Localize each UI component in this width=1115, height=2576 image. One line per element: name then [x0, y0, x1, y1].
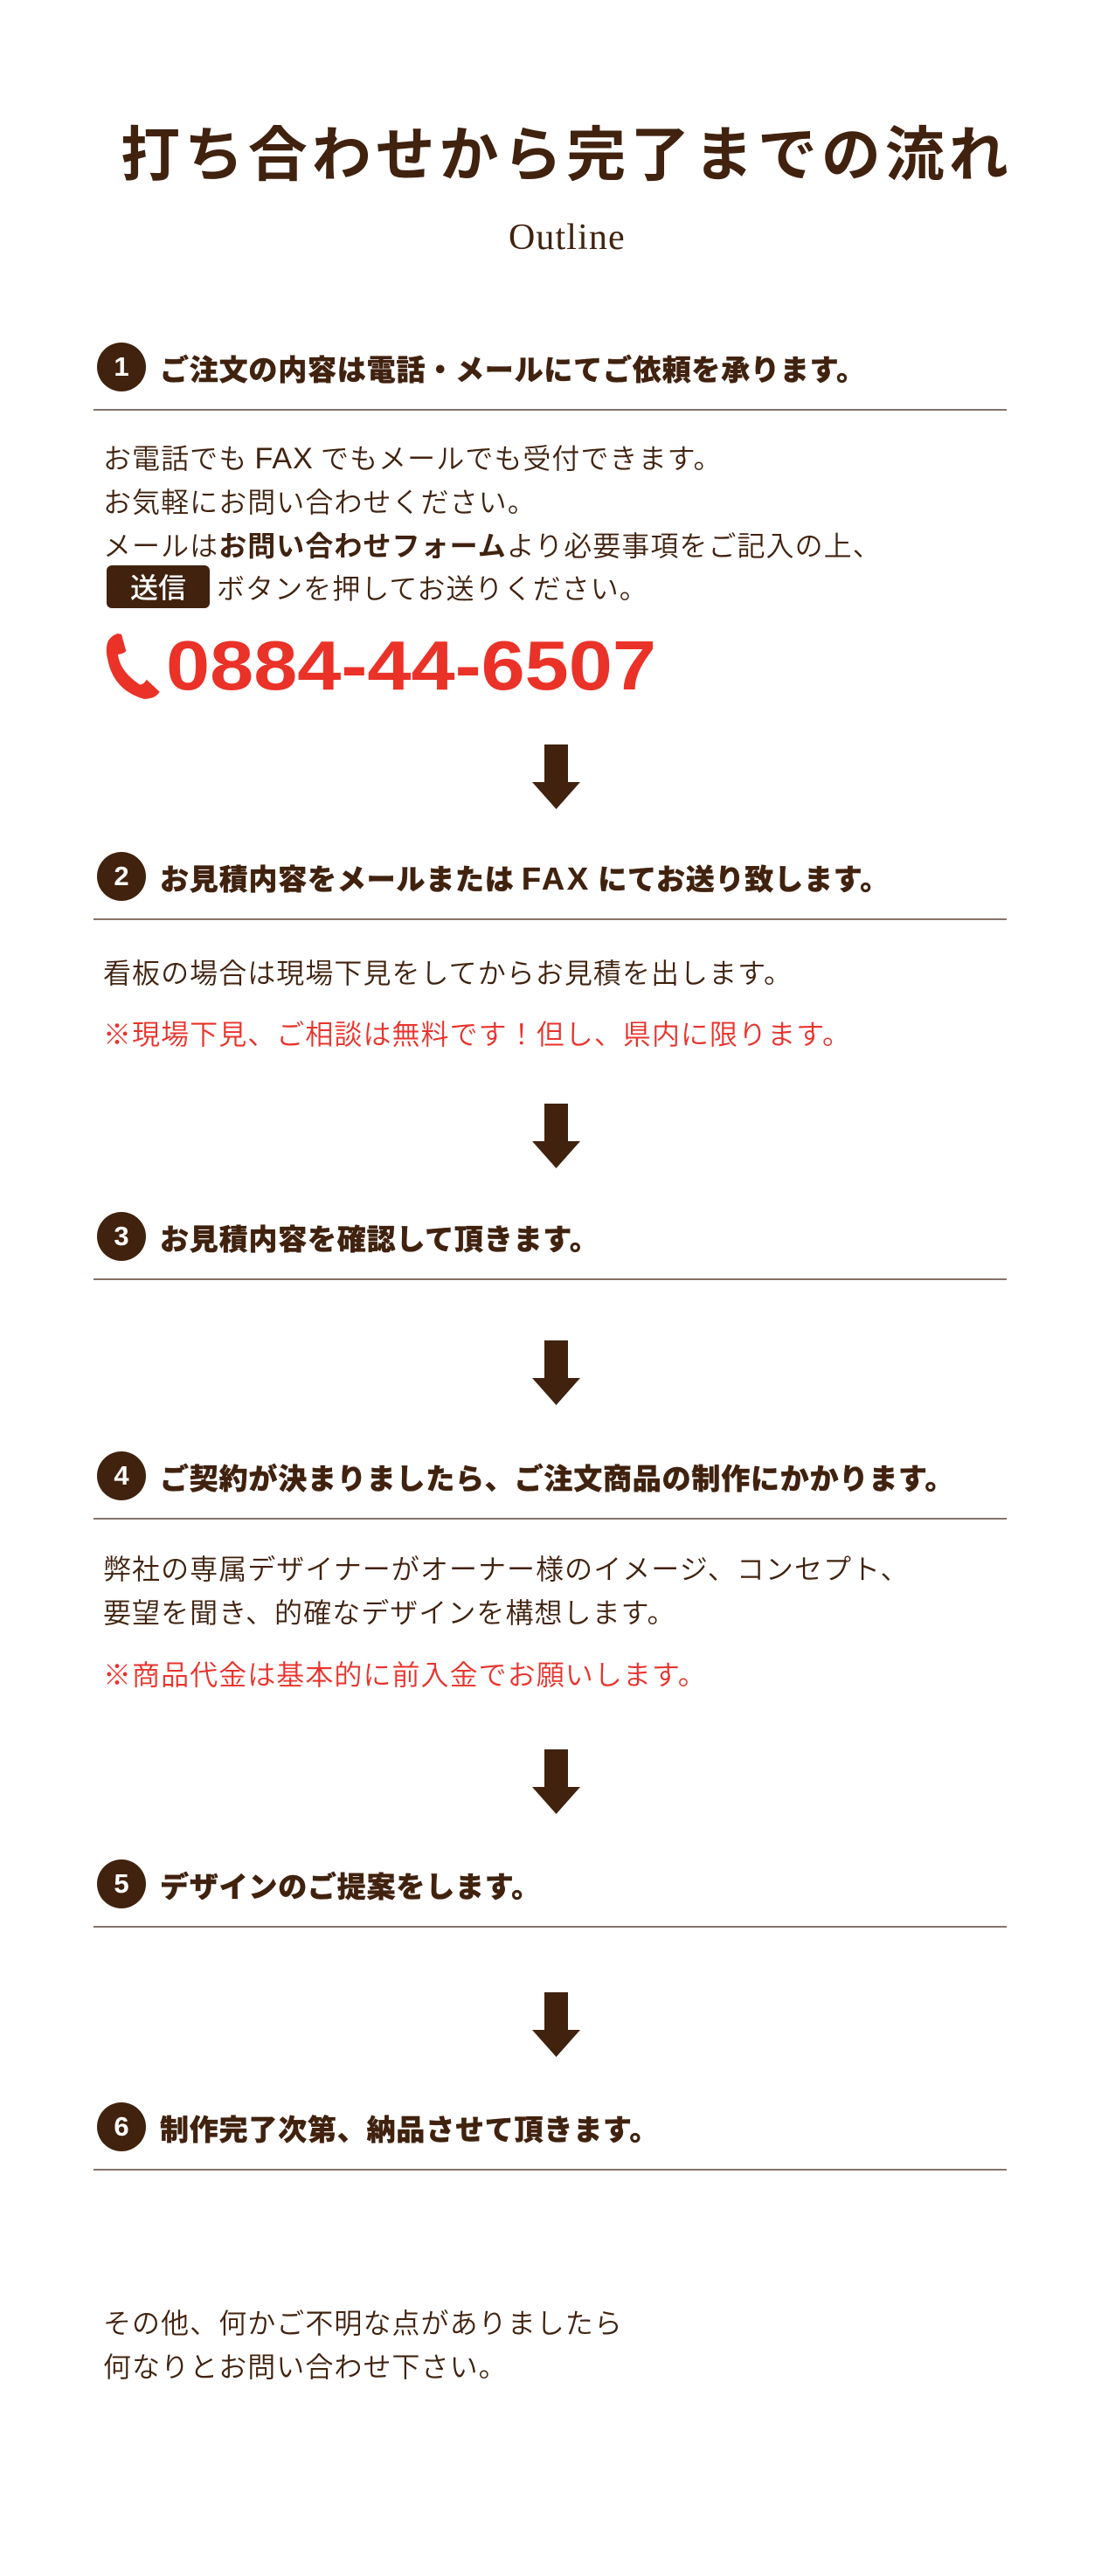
step 2 title: お見積内容をメールまたは FAX にてお送り致します。: [160, 856, 890, 898]
closing text: 何なりとお問い合わせ下さい。: [103, 2345, 508, 2386]
step 6 title: 制作完了次第、納品させて頂きます。: [160, 2107, 659, 2149]
arrow 5: [532, 1992, 580, 2057]
text line: お気軽にお問い合わせください。: [103, 481, 537, 521]
send button: 送信: [130, 566, 186, 606]
step 5 heading: [93, 1859, 1007, 1928]
arrow 4: [532, 1749, 580, 1814]
step 1 title: ご注文の内容は電話・メールにてご依頼を承ります。: [160, 347, 866, 389]
step 2 heading: [93, 852, 1007, 920]
number badge 4: [97, 1451, 146, 1500]
number badge 5: [97, 1859, 146, 1908]
number badge 2: [97, 852, 146, 901]
number badge 6: [97, 2102, 146, 2151]
number badge 4: 4: [114, 1460, 129, 1491]
step 4 body text: 要望を聞き、的確なデザインを構想します。: [103, 1591, 676, 1631]
step 4 red note: ※商品代金は基本的に前入金でお願いします。: [103, 1653, 707, 1693]
step 4 heading: [93, 1451, 1007, 1520]
step 4 title: ご契約が決まりましたら、ご注文商品の制作にかかります。: [160, 1456, 954, 1498]
subtitle: Outline: Outline: [509, 218, 626, 258]
number badge 2: 2: [114, 861, 129, 891]
title: 打ち合わせから完了までの流れ: [121, 107, 1013, 193]
closing text: [103, 2302, 623, 2386]
text line with bold link: メールはお問い合わせフォームより必要事項をご記入の上、: [103, 524, 882, 564]
send button: [107, 565, 210, 608]
icon: telephone: [107, 634, 160, 699]
text line: お電話でも FAX でもメールでも受付できます。: [103, 437, 723, 477]
step 2 body text: 看板の場合は現場下見をしてからお見積を出します。: [103, 952, 793, 992]
number badge 1: [97, 343, 146, 391]
text line after button: ボタンを押してお送りください。: [217, 567, 648, 607]
number badge 3: [97, 1212, 146, 1261]
step 1 heading: [93, 343, 1007, 411]
arrow 2: [532, 1104, 580, 1168]
step 3 title: お見積内容を確認して頂きます。: [160, 1216, 599, 1258]
step 4 body text: [103, 1548, 910, 1631]
step 5 title: デザインのご提案をします。: [160, 1864, 541, 1906]
number badge 3: 3: [114, 1221, 129, 1251]
closing text: その他、何かご不明な点がありましたら: [103, 2302, 623, 2342]
step 2 red note: ※現場下見、ご相談は無料です！但し、県内に限ります。: [103, 1013, 851, 1053]
number badge 6: 6: [114, 2111, 129, 2142]
step 3 heading: [93, 1212, 1007, 1280]
arrow 3: [532, 1340, 580, 1405]
step 1 body text: [103, 437, 882, 608]
arrow 1: [532, 744, 580, 809]
step 4 body text: 弊社の専属デザイナーがオーナー様のイメージ、コンセプト、: [103, 1548, 910, 1588]
number badge 5: 5: [114, 1868, 129, 1899]
phone number: 0884-44-6507: [166, 627, 656, 704]
step 6 heading: [93, 2102, 1007, 2171]
number badge 1: 1: [114, 351, 129, 382]
